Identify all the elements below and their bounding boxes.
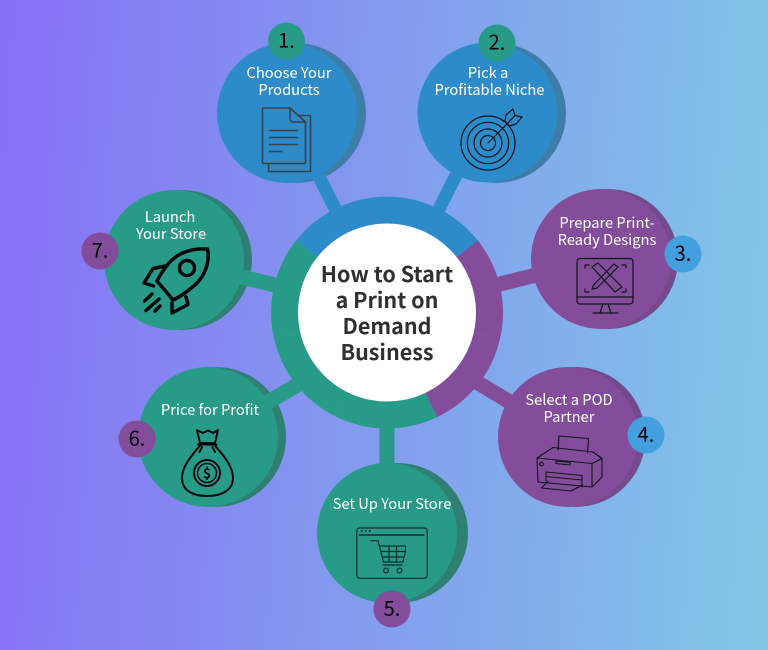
step 5 badge: 5. [384,592,400,622]
step 4 label: Partner [544,406,595,427]
step 7 label: Your Store [135,223,206,244]
step 1 badge: 1. [278,24,295,54]
icon: money bag: $ [203,464,211,484]
icon: money bag [182,430,233,496]
step 3 label: Ready Designs [558,229,656,250]
panel: step 3 prepare print-ready designs [387,189,702,329]
step 6 badge [118,420,156,458]
step 6 label: Price for Profit [161,399,260,420]
central ring [273,210,500,417]
title: Demand [343,310,431,341]
icon: printer [537,436,602,491]
step 1 label: Choose Your [246,62,332,83]
icon: target with arrow [461,109,522,170]
icon: browser window with cart [357,528,427,578]
step 3 label: Prepare Print- [559,212,655,233]
step 7 label: Launch [145,206,195,227]
step 7 badge: 7. [92,234,108,264]
step 6 badge: 6. [129,422,145,452]
icon: monitor with ruler and pencil [577,258,633,313]
step 7 badge [82,232,118,270]
icon: documents [262,108,310,172]
central title circle [298,224,476,402]
step 4 label: Select a POD [525,389,613,410]
step 2 label: Pick a [468,62,508,83]
step 2 badge: 2. [489,26,505,56]
panel: step 2 pick a profitable niche [387,24,566,312]
title: How to Start [321,258,453,289]
step 4 badge [628,416,664,454]
panel: step 5 set up your store [317,400,468,628]
step 5 badge [374,590,410,628]
panel: step 4 select a pod partner [440,360,664,507]
title: a Print on [336,284,438,315]
step 5 label: Set Up Your Store [333,493,451,514]
panel: step 1 choose your products [217,22,387,312]
step 2 label: Profitable Niche [435,79,544,100]
step 3 badge [664,236,702,272]
step 3 badge: 3. [675,238,691,266]
panel: step 6 price for profit [118,366,330,507]
panel: step 7 launch your store [82,190,387,330]
step 1 label: Products [258,79,320,100]
step 1 badge [268,22,305,60]
step 2 badge [478,24,516,62]
step 4 badge: 4. [638,418,654,448]
icon: rocket [144,249,208,313]
title: Business [340,336,434,367]
